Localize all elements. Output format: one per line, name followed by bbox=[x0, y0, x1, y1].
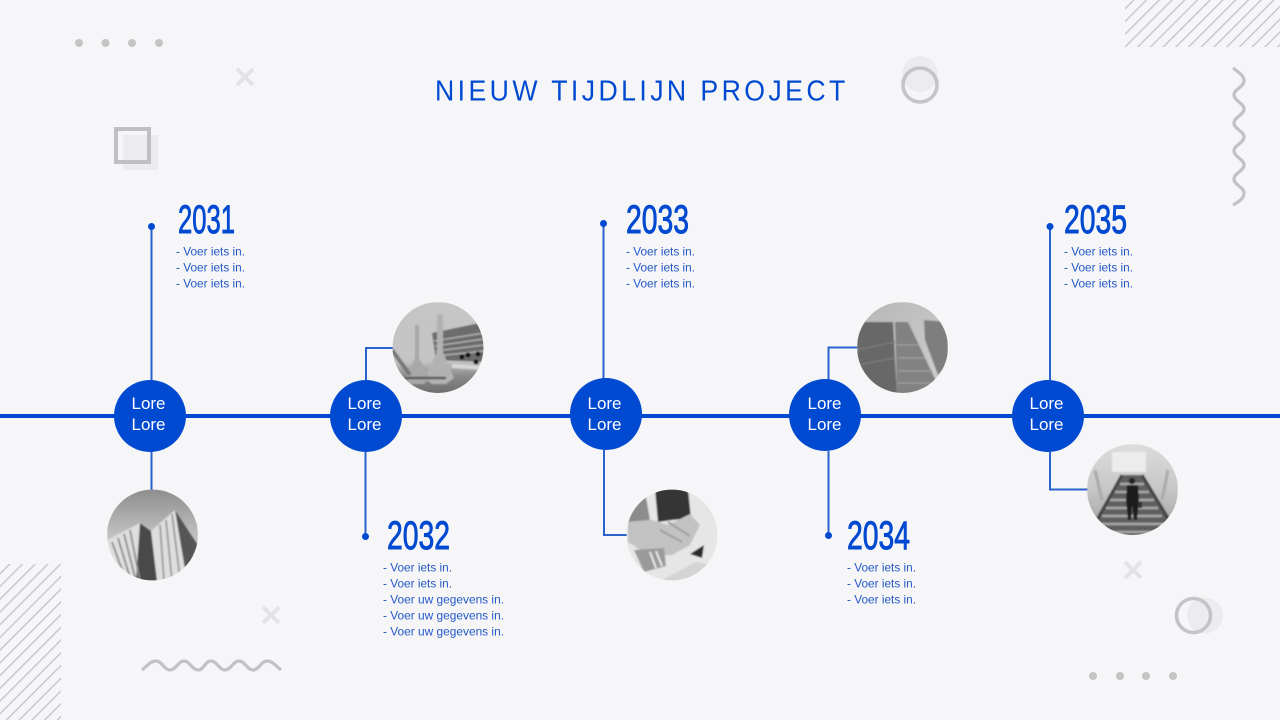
decoration: bottom-left hatch bbox=[0, 564, 61, 720]
text block 2033: - Voer iets in. bbox=[626, 260, 695, 274]
text block 2035: - Voer iets in. bbox=[1064, 260, 1133, 274]
marker dot 2033 bbox=[600, 220, 607, 227]
connector to photo bbox=[1050, 452, 1088, 490]
milestone 2035 bbox=[1012, 198, 1178, 536]
connector to photo bbox=[604, 450, 628, 535]
milestone 2031 bbox=[107, 198, 245, 581]
node 2034: Lore bbox=[807, 415, 842, 434]
decoration: bottom wavy line bbox=[142, 661, 281, 670]
year 2032: 2032 bbox=[387, 514, 450, 558]
connector 2033 bbox=[602, 223, 604, 380]
node 2034: Lore bbox=[807, 394, 842, 413]
year 2031: 2031 bbox=[178, 198, 235, 242]
photo: skyscraper bbox=[107, 489, 198, 581]
timeline axis bbox=[0, 414, 1280, 418]
milestone 2032 bbox=[330, 302, 504, 638]
photo: handshake bbox=[626, 489, 718, 581]
photo: lab flasks bbox=[392, 302, 484, 394]
text block 2034: - Voer iets in. bbox=[847, 592, 916, 606]
connector 2034 bbox=[828, 451, 830, 535]
node 2031: Lore bbox=[131, 394, 166, 413]
node 2035 bbox=[1012, 380, 1084, 452]
text block 2035 bbox=[1064, 244, 1133, 290]
decoration: lower-right ring bbox=[1176, 598, 1223, 634]
marker dot 2031 bbox=[148, 223, 155, 230]
photo: man on stairs bbox=[1087, 444, 1178, 536]
text block 2033 bbox=[626, 244, 695, 290]
decoration: top-right hatch bbox=[1125, 0, 1280, 47]
year 2033: 2033 bbox=[626, 198, 689, 242]
marker dot 2032 bbox=[362, 533, 369, 540]
decoration: top-left cross bbox=[237, 69, 253, 85]
node 2032: Lore bbox=[347, 394, 382, 413]
text block 2032: - Voer iets in. bbox=[383, 560, 452, 574]
text block 2031: - Voer iets in. bbox=[176, 276, 245, 290]
text block 2033: - Voer iets in. bbox=[626, 276, 695, 290]
node 2033 bbox=[570, 378, 642, 450]
connector to photo bbox=[366, 348, 393, 380]
text block 2032: - Voer uw gegevens in. bbox=[383, 592, 504, 606]
text block 2032 bbox=[383, 560, 504, 638]
node 2033: Lore bbox=[587, 394, 622, 413]
year 2035: 2035 bbox=[1064, 198, 1127, 242]
text block 2034: - Voer iets in. bbox=[847, 560, 916, 574]
connector 2031 bbox=[150, 226, 152, 490]
marker dot 2035 bbox=[1046, 223, 1054, 230]
text block 2032: - Voer iets in. bbox=[383, 576, 452, 590]
decoration: top-left dots bbox=[75, 39, 163, 47]
text block 2035: - Voer iets in. bbox=[1064, 244, 1133, 258]
text block 2035: - Voer iets in. bbox=[1064, 276, 1133, 290]
connector 2032 bbox=[364, 452, 366, 536]
node 2031: Lore bbox=[131, 415, 166, 434]
node 2034 bbox=[789, 379, 861, 451]
decoration: top ring bbox=[902, 56, 938, 102]
text block 2034 bbox=[847, 560, 916, 606]
node 2035: Lore bbox=[1029, 415, 1064, 434]
text block 2032: - Voer uw gegevens in. bbox=[383, 624, 504, 638]
marker dot 2034 bbox=[825, 532, 832, 539]
milestone 2034 bbox=[789, 302, 948, 606]
node 2032 bbox=[330, 380, 402, 452]
photo: glass tower bbox=[857, 302, 948, 394]
connector to photo bbox=[828, 348, 857, 380]
text block 2034: - Voer iets in. bbox=[847, 576, 916, 590]
node 2031 bbox=[114, 380, 186, 452]
decoration: bottom-left cross bbox=[263, 607, 279, 623]
connector 2035 bbox=[1049, 226, 1051, 380]
text block 2031 bbox=[176, 244, 245, 290]
decoration: right wavy line bbox=[1233, 68, 1244, 205]
decoration: bottom-right dots bbox=[1089, 672, 1177, 680]
text block 2031: - Voer iets in. bbox=[176, 244, 245, 258]
title: NIEUW TIJDLIJN PROJECT bbox=[435, 75, 845, 107]
text block 2033: - Voer iets in. bbox=[626, 244, 695, 258]
year 2034: 2034 bbox=[847, 514, 910, 558]
node 2035: Lore bbox=[1029, 394, 1064, 413]
decoration: square outline bbox=[116, 129, 158, 170]
node 2032: Lore bbox=[347, 415, 382, 434]
text block 2032: - Voer uw gegevens in. bbox=[383, 608, 504, 622]
decoration: lower-right cross bbox=[1125, 562, 1141, 578]
milestone 2033 bbox=[570, 198, 718, 581]
node 2033: Lore bbox=[587, 415, 622, 434]
text block 2031: - Voer iets in. bbox=[176, 260, 245, 274]
